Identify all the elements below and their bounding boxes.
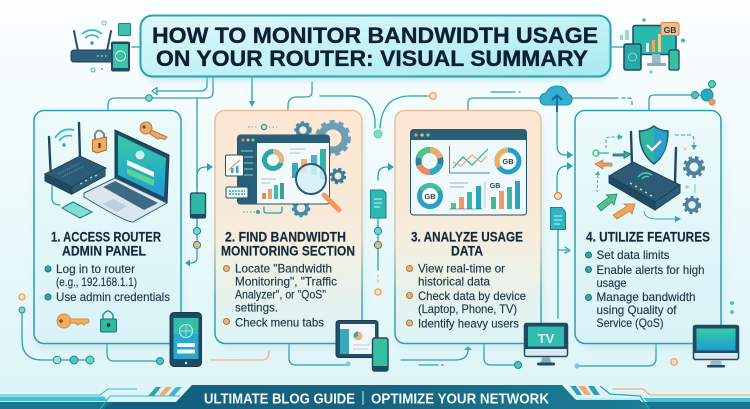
icon: cloud upload <box>540 86 572 112</box>
icon: TV <box>524 324 568 366</box>
bullet list: Identify heavy users <box>418 316 519 330</box>
icon: dashboard window <box>238 135 330 204</box>
bullet list: Check data by device <box>418 289 526 303</box>
heading: MONITORING SECTION <box>221 244 355 258</box>
connector lines <box>22 47 692 366</box>
icon: shield check <box>639 126 668 164</box>
icon: TV: TV <box>538 331 555 346</box>
panel: step 3 analyze usage data <box>395 110 543 348</box>
heading: ADMIN PANEL <box>62 244 146 258</box>
icon: monitor and devices, top right <box>620 18 685 74</box>
icon: laptop <box>84 130 169 222</box>
icon: node cluster <box>692 80 716 105</box>
icon: router and phone, top left <box>71 21 130 72</box>
connector nodes <box>19 93 734 369</box>
icon: monitor and devices, top right: GB <box>664 25 676 35</box>
heading: 2. FIND BANDWIDTH <box>225 230 346 244</box>
icon: small device <box>52 186 92 218</box>
heading: 3. ANALYZE USAGE <box>411 230 523 244</box>
bullet list <box>586 248 704 330</box>
bullet list: (e.g., 192.168.1.1) <box>56 275 137 289</box>
footer banner <box>0 385 750 409</box>
chart: line chart <box>450 146 490 173</box>
bullet list: Check menu tabs <box>235 316 324 330</box>
icon: desktop monitor <box>694 326 738 368</box>
icon: traffic arrows <box>593 134 697 222</box>
icon: orange key <box>57 314 89 328</box>
icon: analytics dashboard <box>410 130 526 215</box>
icon: login phone <box>170 312 202 366</box>
icon: feature gears <box>683 147 704 213</box>
heading: 4. UTILIZE FEATURES <box>586 230 710 244</box>
title: HOW TO MONITOR BANDWIDTH USAGE <box>152 23 598 48</box>
panel: step 1 access router admin panel <box>34 110 182 348</box>
bullet list: Set data limits <box>596 248 670 262</box>
title: ON YOUR ROUTER: VISUAL SUMMARY <box>156 46 588 71</box>
panel: step 2 find bandwidth monitoring section <box>215 110 363 348</box>
bullet list: usage <box>596 276 627 290</box>
icon: key <box>140 122 167 140</box>
icon: router <box>45 123 106 194</box>
chart: right bars: GB <box>490 183 500 190</box>
title <box>140 16 610 80</box>
icon: tablet and phone <box>336 320 388 371</box>
chart: middle bars <box>449 183 483 209</box>
bullet list: Manage bandwidth <box>596 290 696 304</box>
bullet list: Log in to router <box>56 262 135 276</box>
bullet list: (Laptop, Phone, TV) <box>418 302 517 316</box>
heading: 1. ACCESS ROUTER <box>51 230 161 244</box>
icon: router with antennas <box>609 132 680 210</box>
bullet list: Analyzer", or "QoS" <box>235 288 326 302</box>
icon: padlock <box>92 130 106 153</box>
bullet list: View real-time or <box>418 262 505 276</box>
bullet list: historical data <box>418 274 490 288</box>
icon: magnifying glass <box>296 164 339 210</box>
bullet list: Use admin credentials <box>56 290 170 304</box>
bullet list: Monitoring", "Traffic <box>235 274 337 288</box>
heading <box>411 230 523 258</box>
heading <box>51 230 161 258</box>
heading <box>221 230 355 258</box>
icon: document middle <box>370 190 386 218</box>
bullet list: settings. <box>235 300 278 314</box>
bullet list: Enable alerts for high <box>596 263 704 277</box>
icon: document right <box>550 208 566 230</box>
bullet list: Service (QoS) <box>596 316 664 330</box>
heading: DATA <box>451 244 483 258</box>
panel: step 4 utilize features <box>575 110 723 348</box>
icon: green padlock <box>100 311 116 332</box>
bullet list <box>45 262 170 304</box>
chart: GB donut left: GB <box>424 192 436 201</box>
chart: GB donut right: GB <box>502 157 514 166</box>
icon: gears <box>293 122 349 216</box>
decorative dots <box>243 124 282 214</box>
bullet list: Locate "Bandwidth <box>235 262 332 276</box>
bullet list <box>406 262 526 330</box>
chart: donut multicolor <box>418 150 440 172</box>
bullet list <box>224 262 337 330</box>
icon: phone left <box>190 193 206 218</box>
footer banner: OPTIMIZE YOUR NETWORK <box>371 392 549 408</box>
bullet list: using Quality of <box>596 303 677 317</box>
footer banner: ULTIMATE BLOG GUIDE <box>204 392 355 408</box>
icon: chart cards <box>226 155 248 198</box>
